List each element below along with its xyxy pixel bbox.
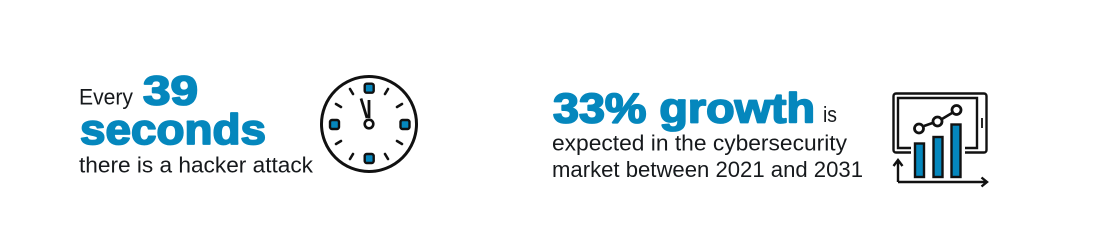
text: Every 39 seconds there is a hacker attack: seconds xyxy=(80,106,266,154)
text: 33% growth is expected in the cybersecurity market between 2021 and 2031: is xyxy=(823,102,837,127)
panel: market growth statistic xyxy=(552,84,987,186)
text: 33% growth is expected in the cybersecurity market between 2021 and 2031: 33% growth xyxy=(553,84,815,132)
text: 33% growth is expected in the cybersecurity market between 2021 and 2031: expected in the cybersecurity xyxy=(552,130,847,156)
icon: clock xyxy=(322,76,416,172)
icon: tablet with growth chart xyxy=(894,94,987,186)
panel: hacker attack statistic xyxy=(79,68,416,178)
text: 33% growth is expected in the cybersecurity market between 2021 and 2031 xyxy=(552,84,863,182)
text: Every 39 seconds there is a hacker attack: Every xyxy=(79,84,133,110)
text: Every 39 seconds there is a hacker attack: there is a hacker attack xyxy=(79,152,314,178)
text: Every 39 seconds there is a hacker attack xyxy=(79,68,314,178)
text: Every 39 seconds there is a hacker attack: 39 xyxy=(143,68,198,114)
text: 33% growth is expected in the cybersecurity market between 2021 and 2031: market between 2021 and 2031 xyxy=(552,157,863,182)
